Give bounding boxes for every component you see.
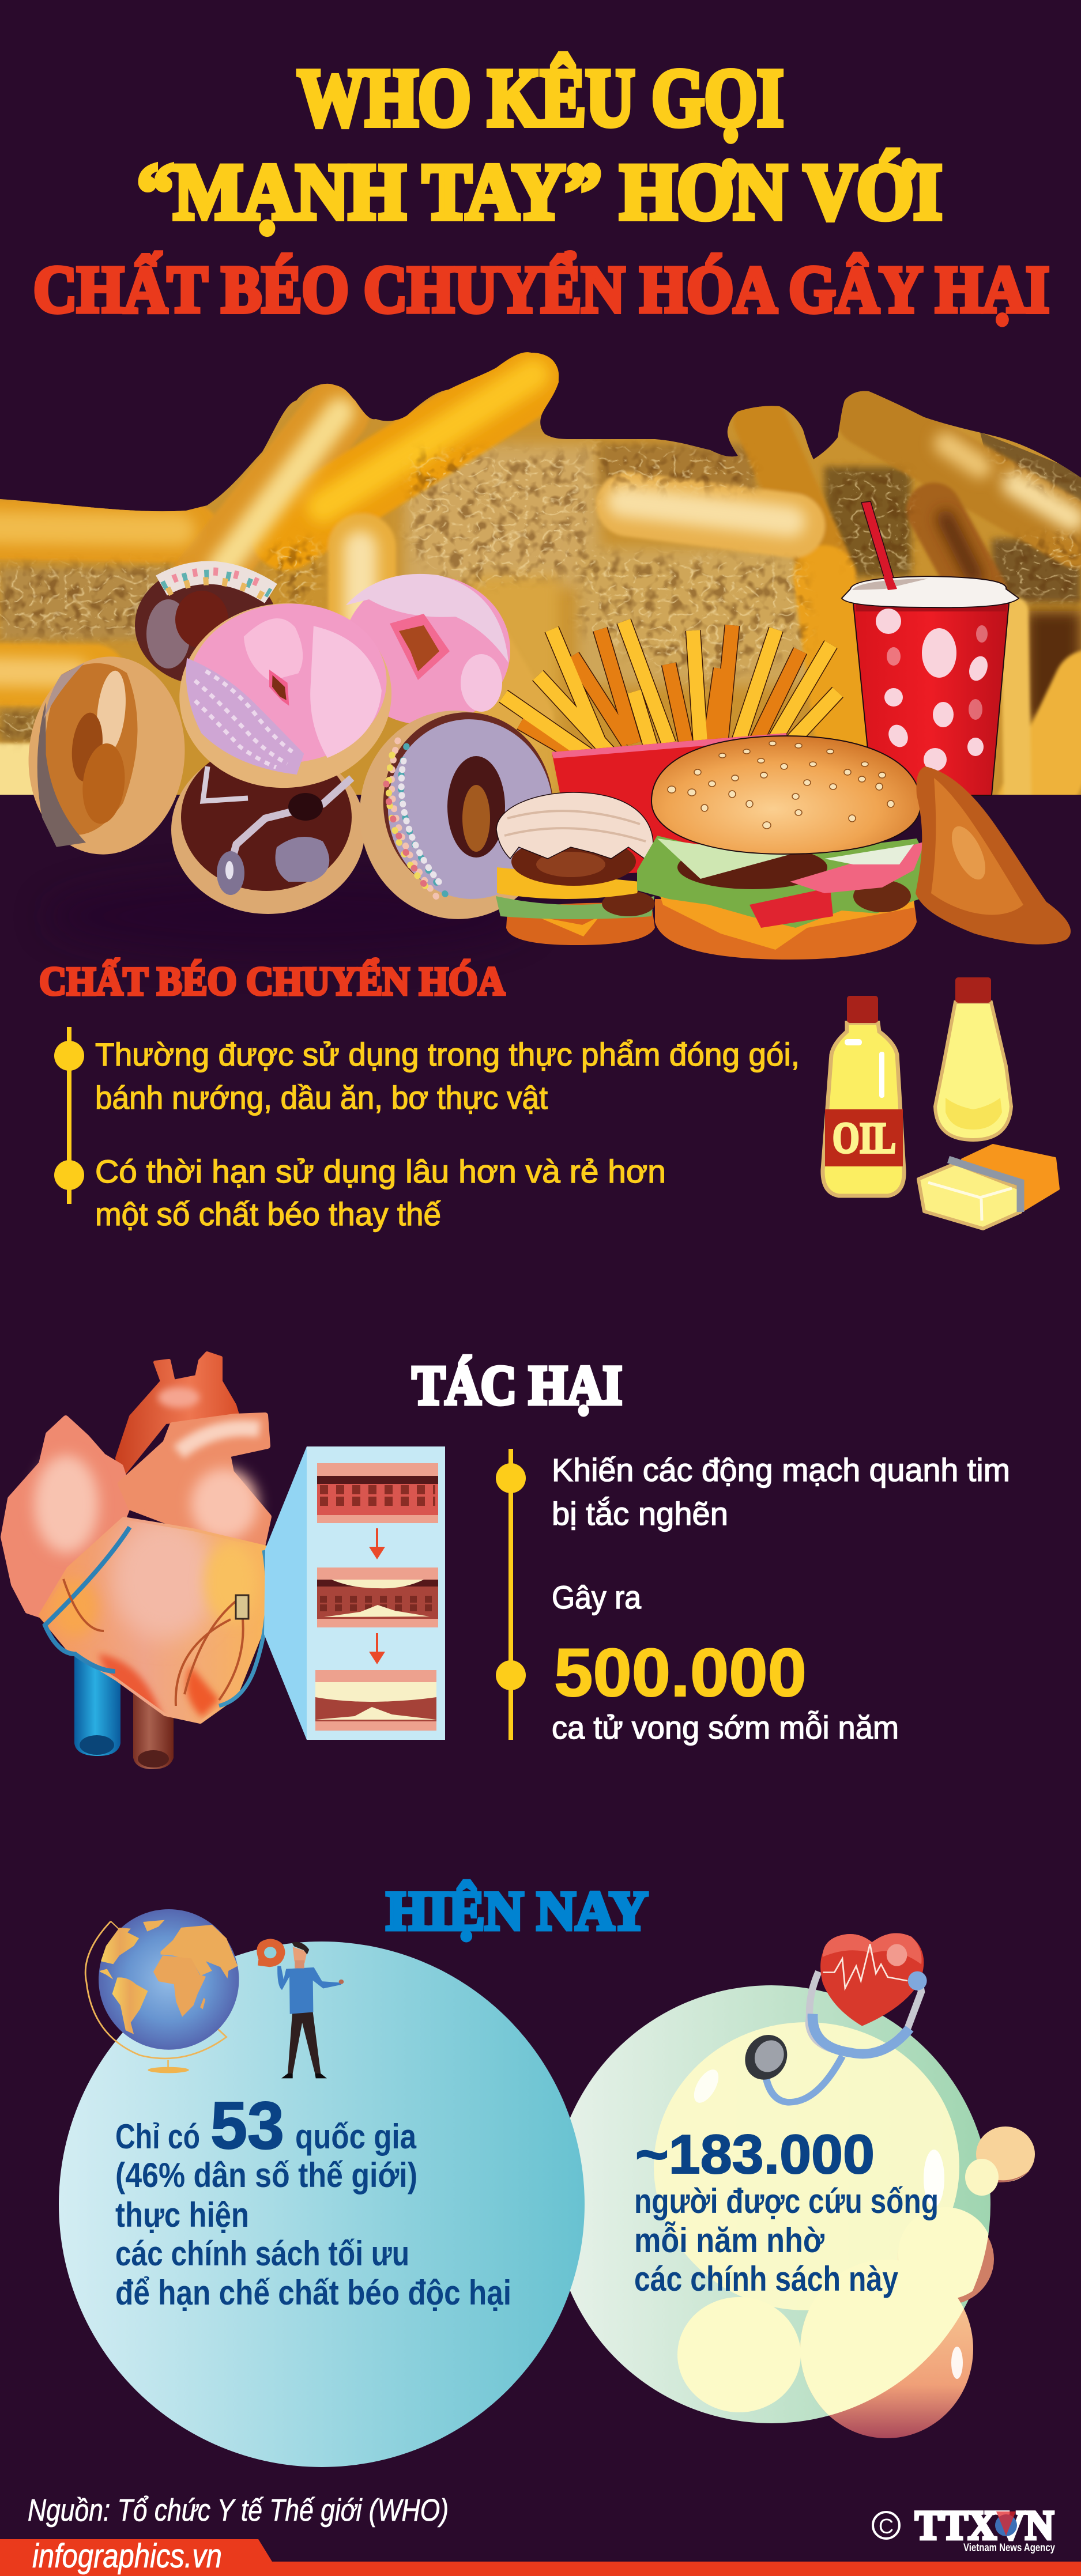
- illustration: donut brown: [19, 649, 194, 862]
- illustration: pink donut front: [173, 596, 398, 795]
- footer text: infographics.vn: [32, 2537, 222, 2575]
- ventricle: [42, 1520, 269, 1721]
- illustration: human heart: [3, 1353, 269, 1769]
- illustration: chocolate donut: [171, 743, 365, 914]
- foam and bubbles: [0, 440, 1081, 743]
- arrow 2: [369, 1633, 385, 1664]
- text: trans fat usage: [95, 1036, 800, 1232]
- text: harm details: Gây ra: [552, 1579, 642, 1615]
- arrow 1: [369, 1528, 385, 1559]
- illustration: small burger: [496, 792, 655, 945]
- logo: TTXVN: TTXVN: [915, 2502, 1054, 2548]
- icon: globe: [85, 1909, 239, 2073]
- logo: TTXVN: Vietnam News Agency: [963, 2542, 1055, 2554]
- text: countries: quốc gia: [295, 2117, 417, 2156]
- text: lives saved: [634, 2182, 939, 2298]
- heading: now: HIỆN NAY: [386, 1880, 648, 1942]
- text: countries: các chính sách tối ưu: [115, 2234, 409, 2273]
- text: countries: để hạn chế chất béo độc hại: [115, 2273, 511, 2312]
- label text: OIL: OIL: [833, 1114, 896, 1162]
- illustration: big burger: [637, 736, 929, 960]
- number: 183.000: ~183.000: [635, 2124, 875, 2185]
- aorta: [117, 1353, 238, 1478]
- text: harm details: Khiến các động mạch quanh tim: [552, 1452, 1010, 1488]
- illustration: lilac donut with sprinkles: [349, 701, 564, 929]
- number: 500.000: 500.000: [554, 1635, 807, 1711]
- timeline: harm bullets: [496, 1449, 526, 1740]
- artery: blocked: [315, 1670, 436, 1731]
- panel: saved lives circle: [552, 1985, 1035, 2438]
- pulmonary artery: [120, 1415, 269, 1546]
- number: 53: 53: [210, 2088, 284, 2163]
- fry highlights: [0, 375, 1072, 673]
- copyright mark: [873, 2512, 899, 2539]
- text: lives saved: người được cứu sống: [634, 2182, 939, 2220]
- left atrium: [3, 1418, 131, 1615]
- text: lives saved: các chính sách này: [634, 2260, 899, 2298]
- text: trans fat usage: Có thời hạn sử dụng lâu hơn và rẻ hơn: [95, 1153, 666, 1189]
- text: harm details: ca tử vong sớm mỗi năm: [552, 1709, 899, 1746]
- oil base colours: [0, 346, 1081, 795]
- donut shadow: [46, 876, 530, 957]
- vessels below heart: [74, 1648, 174, 1769]
- copyright mark: C: [879, 2514, 894, 2538]
- title: “MẠNH TAY” HƠN VỚI: [137, 148, 942, 236]
- illustration: drink cup: [842, 501, 1019, 795]
- heading: trans fat: CHẤT BÉO CHUYỂN HÓA: [39, 958, 505, 1004]
- text: harm details: bị tắc nghẽn: [552, 1495, 728, 1532]
- text: trans fat usage: Thường được sử dụng trong thực phẩm đóng gói,: [95, 1036, 800, 1072]
- artery: early plaque: [317, 1567, 438, 1627]
- text: countries: thực hiện: [115, 2196, 249, 2234]
- fries: [0, 377, 1081, 807]
- text: countries: [115, 2117, 511, 2312]
- text: trans fat usage: một số chất béo thay thế: [95, 1196, 441, 1232]
- title: [33, 52, 1049, 327]
- illustration: fat deposit inside: [800, 2207, 993, 2438]
- artery: healthy: [317, 1463, 438, 1523]
- footer bar: [0, 2539, 1081, 2576]
- illustration: fries box: [503, 621, 838, 876]
- illustration: fat deposit outer: [800, 2126, 1035, 2438]
- illustration: chicken nugget: [916, 766, 1071, 945]
- title: WHO KÊU GỌI: [297, 52, 784, 143]
- heading: harm: TÁC HẠI: [412, 1354, 622, 1416]
- icon: heart with stethoscope: [739, 1933, 927, 2102]
- photo: frying french fries: [0, 346, 1081, 807]
- text: countries: (46% dân số thế giới): [115, 2156, 417, 2194]
- icon: oil bottle with label: [823, 996, 904, 1196]
- text: countries: Chỉ có: [115, 2117, 200, 2156]
- timeline: trans fat bullets: [54, 1027, 84, 1204]
- icon: person holding donut: [257, 1939, 344, 2078]
- logo: TTXVN: [873, 2502, 1055, 2554]
- illustration: dark donut with sprinkles: [135, 565, 278, 685]
- icon: slim oil bottle: [935, 977, 1011, 1140]
- text: harm details: [552, 1452, 1010, 1746]
- text: lives saved: mỗi năm nhờ: [634, 2221, 824, 2260]
- text: trans fat usage: bánh nướng, dầu ăn, bơ thực vật: [95, 1079, 548, 1116]
- panel: countries circle: [59, 1942, 585, 2467]
- source: Nguồn: Tổ chức Y tế Thế giới (WHO): [28, 2493, 449, 2528]
- illustration: pink donut back: [343, 574, 510, 725]
- panel: artery magnification: [264, 1446, 445, 1740]
- icon: butter block: [918, 1145, 1059, 1229]
